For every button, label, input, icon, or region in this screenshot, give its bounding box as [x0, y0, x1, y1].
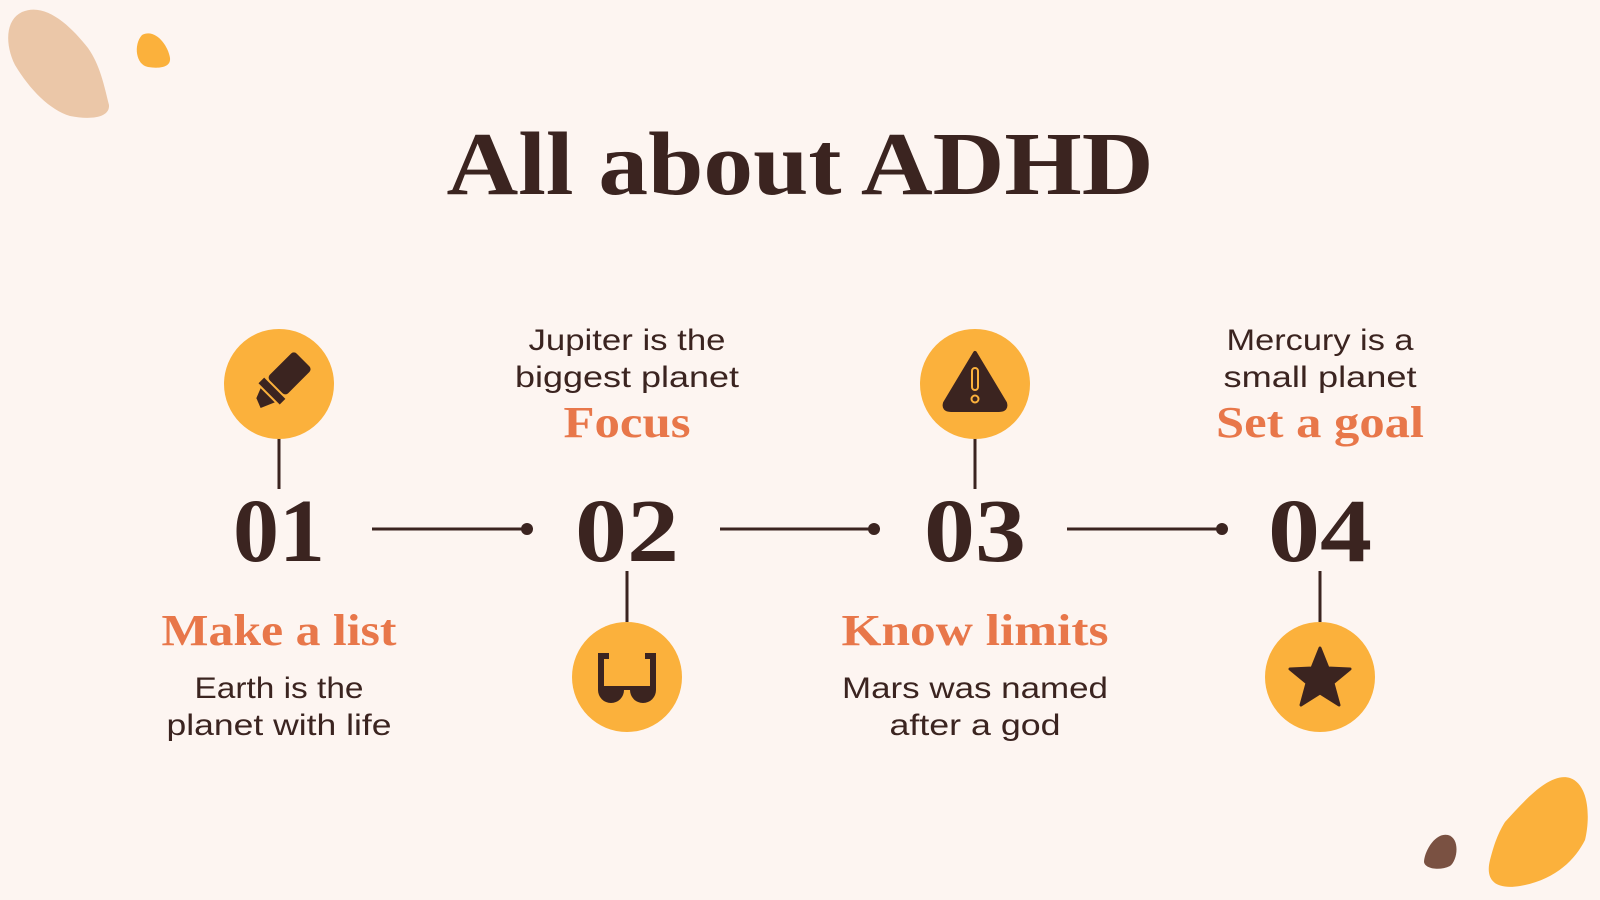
heading: Make a list: Make a list: [162, 606, 397, 655]
number 01: 01: [233, 482, 325, 581]
number 03: 03: [924, 482, 1026, 581]
text: Mercury: Mercury is a: [1226, 324, 1414, 357]
icon: highlighter: [224, 329, 334, 439]
icon: warning: [920, 329, 1030, 439]
step 01: [162, 329, 397, 742]
title: All about ADHD: [446, 115, 1154, 214]
text: Mars: Mars was named: [842, 672, 1108, 705]
heading: Focus: Focus: [564, 398, 690, 447]
text: Jupiter: biggest planet: [515, 361, 740, 394]
decorative blob bottom-right: [1424, 777, 1588, 887]
text: Mercury: small planet: [1224, 361, 1417, 394]
step 04: [1216, 324, 1424, 732]
decorative blob top-left: [8, 10, 170, 118]
number 02: 02: [575, 482, 679, 581]
heading: Set a goal: Set a goal: [1216, 398, 1424, 447]
text: Earth: planet with life: [166, 709, 392, 742]
timeline connectors: [279, 438, 1320, 622]
text: Mars: after a god: [890, 709, 1060, 742]
heading: Know limits: Know limits: [842, 606, 1108, 655]
text: Jupiter: Jupiter is the: [528, 324, 726, 357]
step 03: [842, 329, 1108, 742]
number 04: 04: [1268, 482, 1372, 581]
text: Earth: Earth is the: [194, 672, 364, 705]
icon: star: [1265, 622, 1375, 732]
icon: glasses: [572, 622, 682, 732]
step 02: [515, 324, 740, 732]
